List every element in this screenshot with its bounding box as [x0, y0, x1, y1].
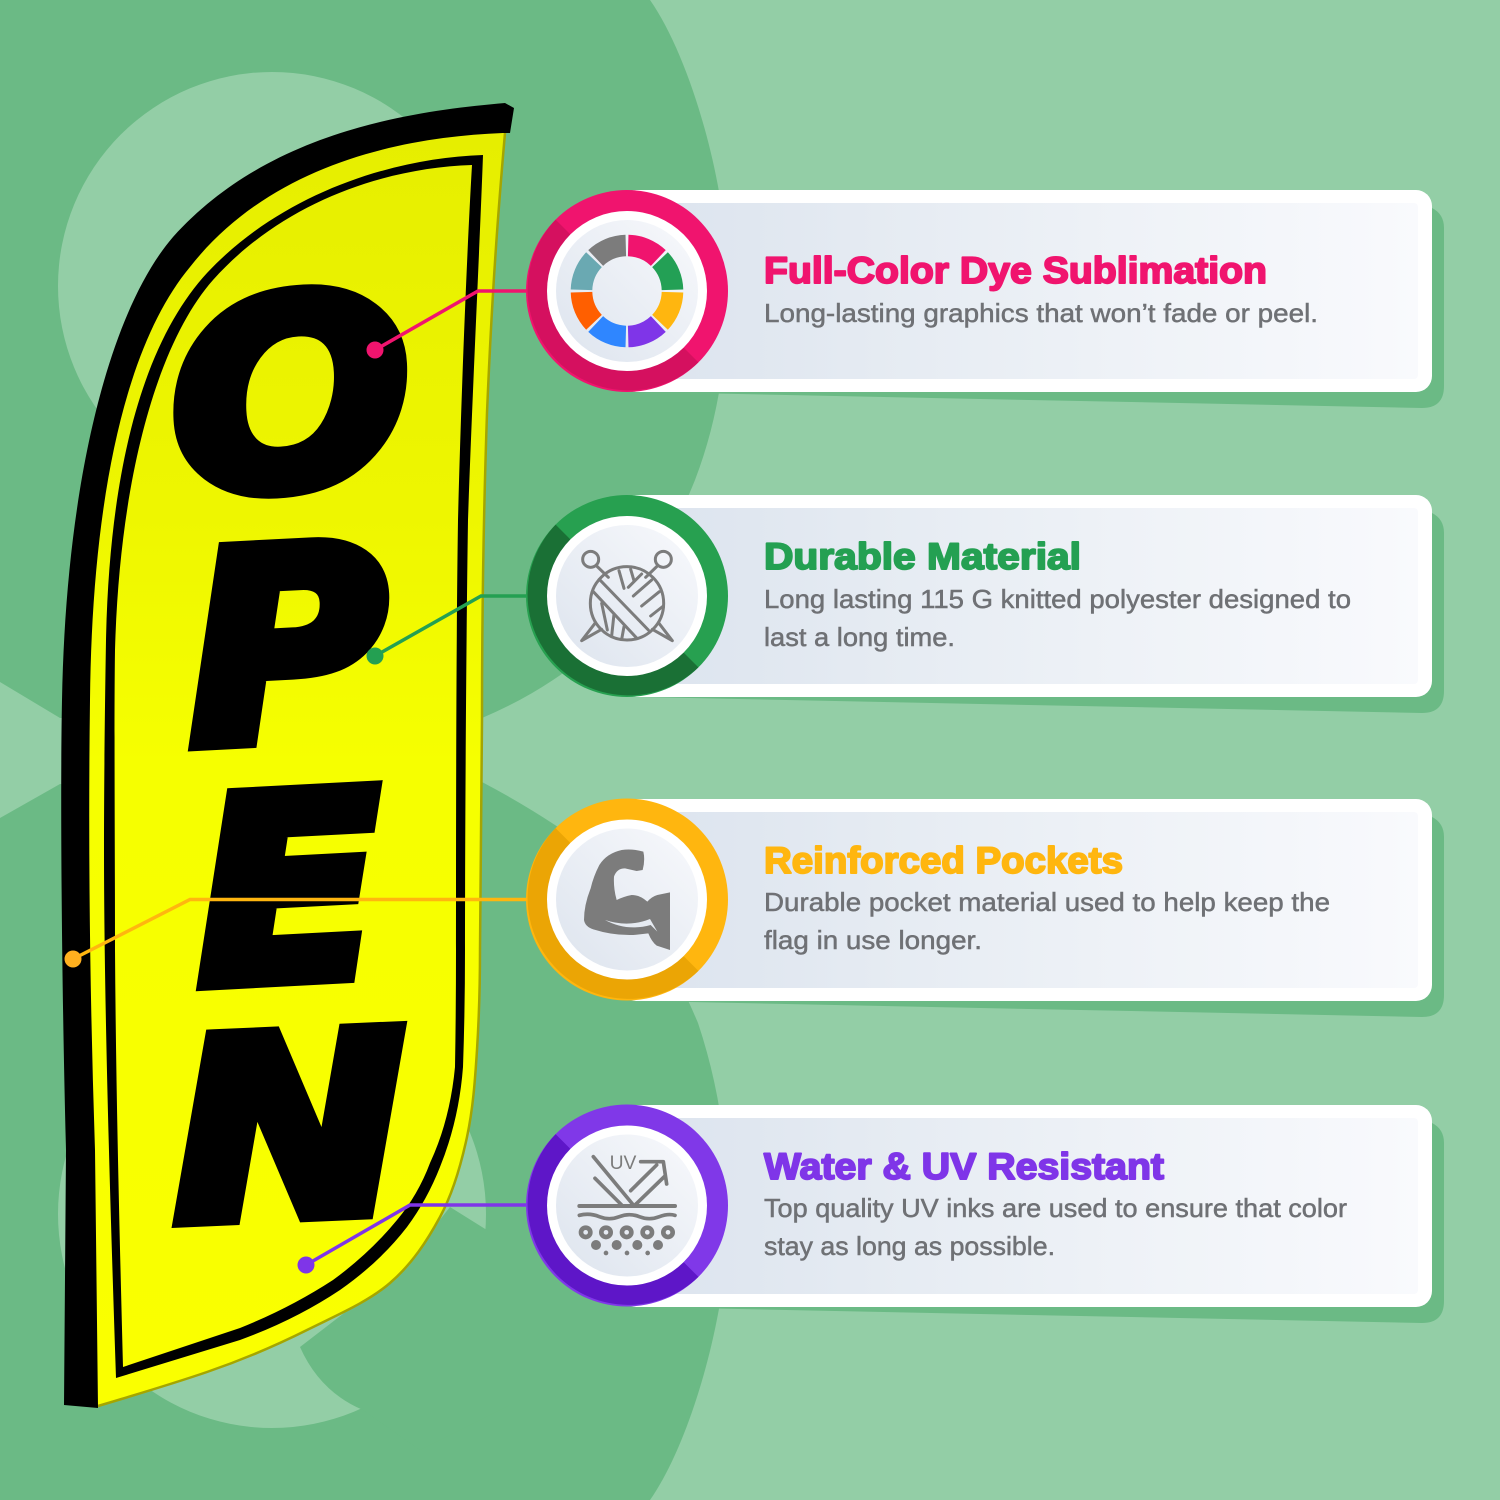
description	[764, 584, 1351, 652]
connector 2	[366, 596, 530, 664]
icon: flexed arm	[584, 849, 670, 950]
connector 1	[366, 291, 530, 358]
heading: Durable Material	[764, 536, 1081, 577]
description	[764, 887, 1330, 955]
ring badge 3	[526, 798, 728, 1000]
description: last a long time.	[764, 622, 955, 652]
description: Durable pocket material used to help keep the	[764, 887, 1330, 917]
description: Top quality UV inks are used to ensure that color	[764, 1193, 1347, 1223]
flag lettering: N	[166, 979, 413, 1279]
description: stay as long as possible.	[764, 1231, 1055, 1261]
feature 4 card	[620, 1105, 1444, 1323]
flag lettering: O	[163, 239, 418, 553]
flag lettering: P	[179, 491, 395, 806]
ring badge 4	[526, 1104, 728, 1306]
icon: color wheel	[563, 227, 691, 355]
flag lettering	[163, 239, 418, 1279]
flag sleeve	[61, 103, 514, 1408]
description: Long lasting 115 G knitted polyester designed to	[764, 584, 1351, 614]
description: flag in use longer.	[764, 925, 982, 955]
connector 3	[64, 900, 530, 968]
ring badge 2	[526, 495, 728, 697]
flag lettering: E	[188, 738, 389, 1044]
feature 1 card	[620, 190, 1444, 408]
icon: UV reflection on skin layers	[579, 1153, 675, 1255]
icon: yarn ball and needles	[582, 551, 672, 641]
feature 2 card	[620, 495, 1444, 713]
heading: Full-Color Dye Sublimation	[764, 250, 1267, 291]
flag fabric	[75, 124, 505, 1406]
icon: UV reflection on skin layers: UV	[610, 1153, 637, 1174]
feature 3 card	[620, 799, 1444, 1017]
heading: Water & UV Resistant	[764, 1146, 1164, 1187]
description: Long-lasting graphics that won’t fade or peel.	[764, 298, 1318, 328]
heading: Reinforced Pockets	[764, 840, 1123, 881]
flag inner border	[104, 155, 483, 1378]
description	[764, 1193, 1347, 1261]
connector 4	[298, 1205, 530, 1274]
ring badge 1	[526, 190, 728, 392]
feather flag	[61, 103, 514, 1408]
